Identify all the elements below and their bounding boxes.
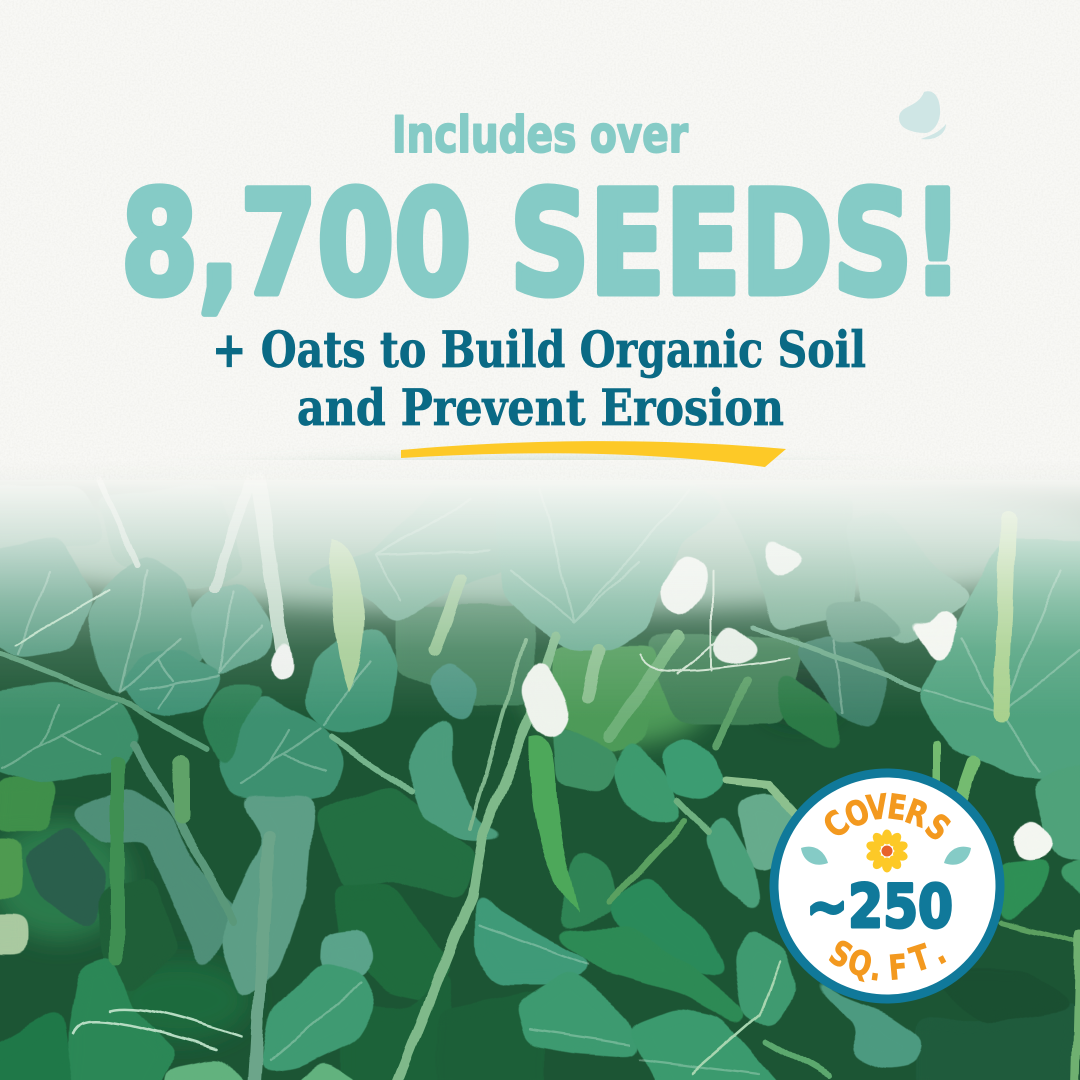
badge text: SQ. FT.: . [925,933,952,973]
badge text: COVERS: C [816,803,857,846]
icon: flower [865,830,909,872]
subheading line 1: + Oats to Build Organic Soil [212,320,866,379]
yellow underline swoosh [401,441,786,467]
icon: butterfly [899,91,946,139]
icon: right leaf [944,847,971,865]
badge text: SQ. FT.: Q [843,942,876,986]
pea pods [330,539,578,912]
badge: covers 250 sq ft [774,773,1000,999]
subheading [212,320,866,437]
badge text: ~250: ~250 [806,872,953,942]
big pale upper leaves [0,480,1080,776]
foliage dark base [0,460,1080,1080]
badge circle [774,773,1000,999]
badge text: COVERS: V [865,787,890,829]
organic foliage layers [0,480,1080,1080]
badge text: COVERS [816,787,957,849]
badge text: SQ. FT.: T [905,937,935,981]
white pea flowers [273,541,1051,857]
mid leaves [0,541,1080,994]
badge text: COVERS: E [885,787,909,829]
badge text: SQ. FT.: . [868,949,884,989]
subheading line 2: and Prevent Erosion [297,378,784,437]
stems and tendrils [0,480,1080,1080]
lower leaves [0,879,919,1080]
leaf veins [0,490,1080,1075]
foliage tone blotches [0,470,1080,1040]
back dark leaves [0,610,1080,1080]
badge text: COVERS: R [900,792,934,836]
cloth weave texture [0,0,1080,480]
badge text: SQ. FT.: F [887,947,909,989]
badge text: SQ. FT. [823,933,952,989]
badge text: SQ. FT.: S [823,933,859,977]
icon: left leaf [801,847,828,865]
badge text: COVERS: S [917,806,957,849]
heading: Includes over: Includes over [392,106,688,164]
pea plant photo [0,460,1080,1080]
badge text: COVERS: O [839,791,876,837]
white fade over photo [0,460,1080,720]
